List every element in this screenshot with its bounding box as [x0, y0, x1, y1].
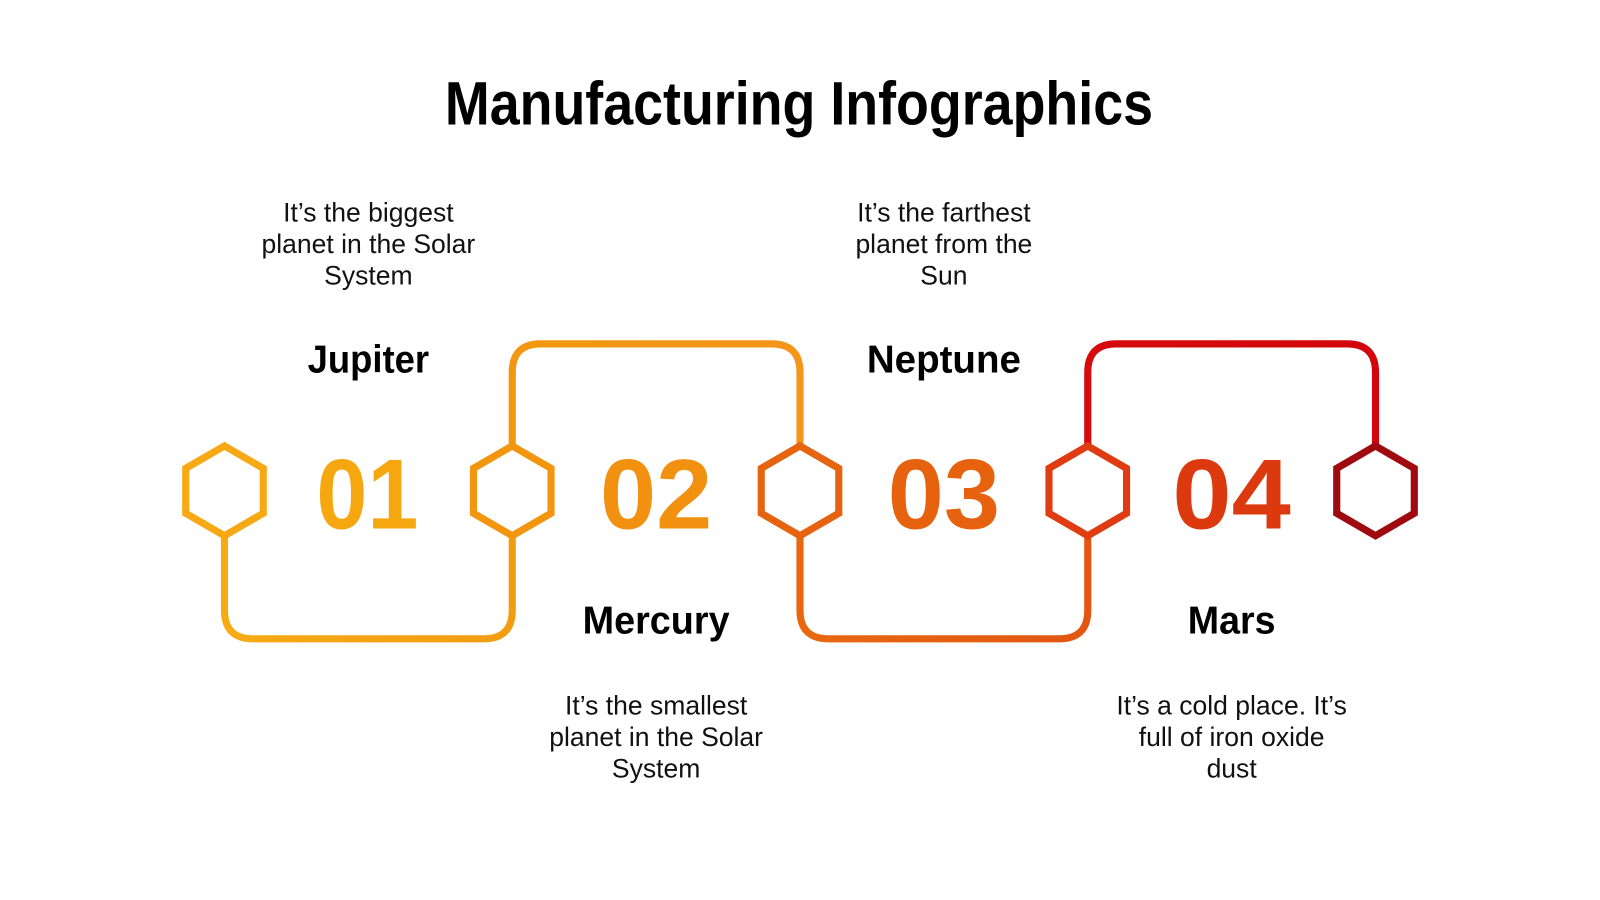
step 04: Mars: It’s a cold place. It’s [1116, 690, 1347, 720]
step 02: Mercury [549, 439, 763, 784]
step 02: Mercury: Mercury [583, 600, 730, 643]
title: Manufacturing Infographics [445, 69, 1153, 137]
step 01: Jupiter: System [324, 261, 413, 291]
step 02: Mercury: 02 [600, 439, 712, 550]
step 04: Mars: dust [1207, 754, 1257, 784]
step 04: Mars: 04 [1172, 439, 1291, 550]
hexagons [186, 446, 1414, 536]
step 03: Neptune [855, 197, 1032, 550]
step 04: Mars [1116, 439, 1347, 784]
step 01: Jupiter [261, 197, 475, 550]
connector lines [224, 344, 1376, 639]
step 03: Neptune: Sun [920, 261, 967, 291]
step 03: Neptune: planet from the [855, 229, 1032, 259]
step 01: Jupiter: 01 [316, 439, 418, 550]
step 02: Mercury: It’s the smallest [565, 690, 748, 720]
step 03: Neptune: It’s the farthest [857, 197, 1031, 227]
step 03: Neptune: 03 [888, 439, 1000, 550]
step 01: Jupiter: planet in the Solar [261, 229, 475, 259]
step 02: Mercury: System [612, 754, 700, 784]
step 02: Mercury: planet in the Solar [549, 722, 763, 752]
step 04: Mars: full of iron oxide [1139, 722, 1324, 752]
step 03: Neptune: Neptune [867, 338, 1021, 381]
step 01: Jupiter: Jupiter [308, 338, 429, 381]
step 01: Jupiter: It’s the biggest [283, 197, 454, 227]
step 04: Mars: Mars [1188, 600, 1276, 643]
